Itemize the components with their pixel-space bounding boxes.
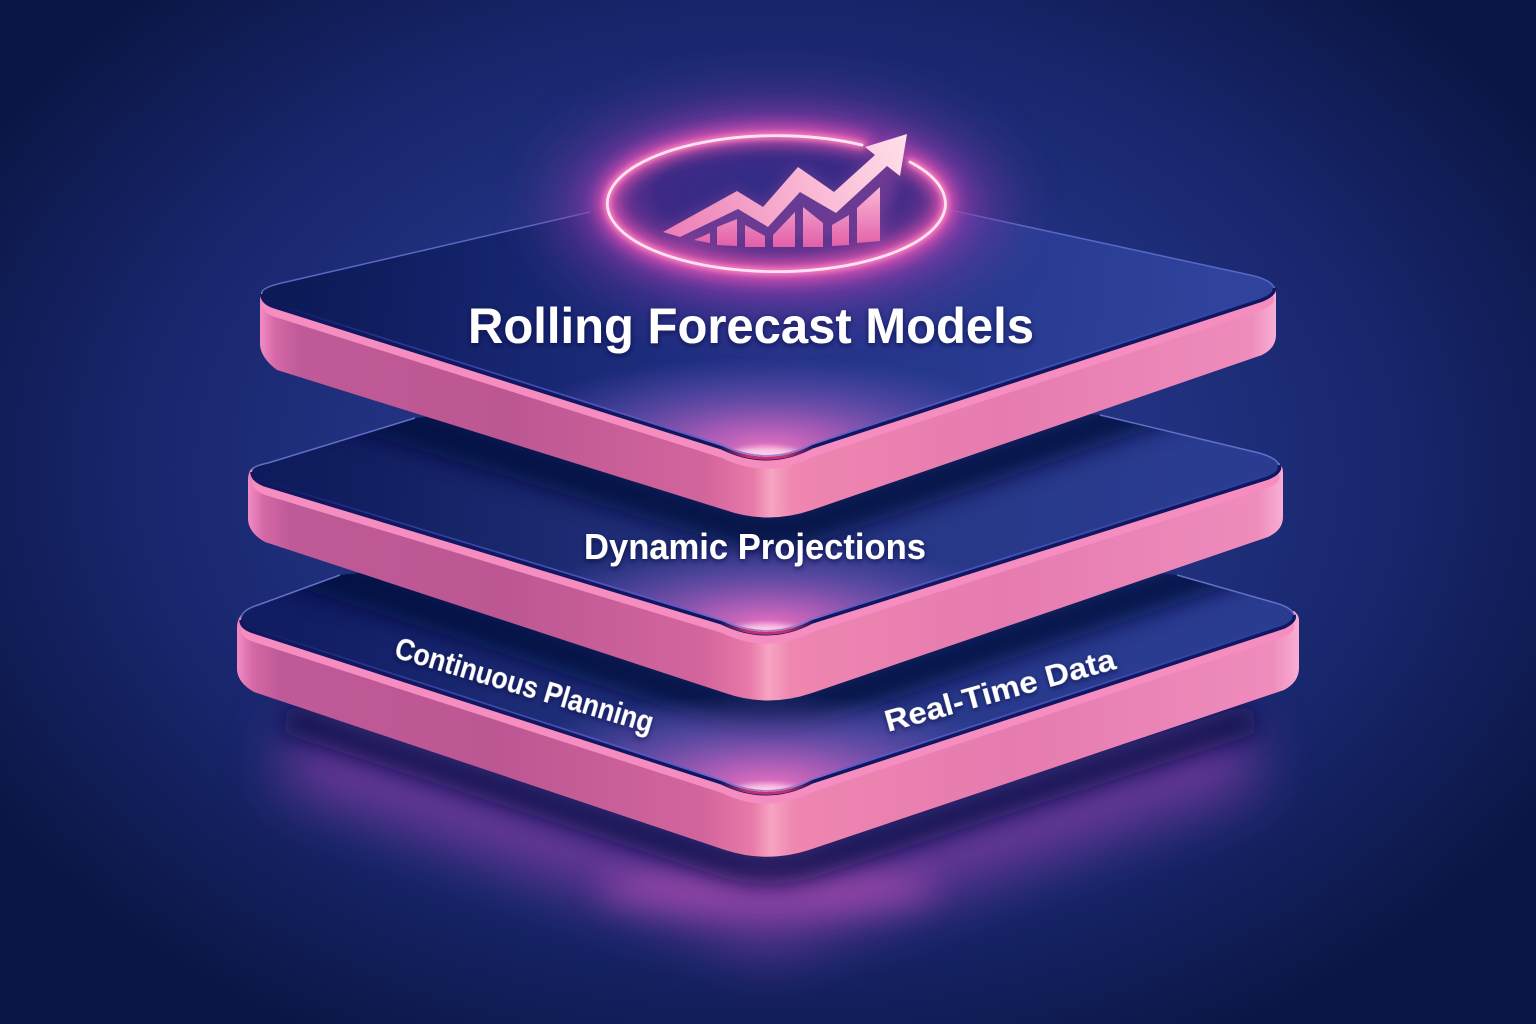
middle layer rim highlight (252, 474, 1280, 644)
title: Rolling Forecast Models (468, 298, 1034, 354)
top layer edge lines (262, 210, 1274, 459)
chart arrow (663, 134, 907, 237)
top layer top face (262, 190, 1274, 459)
bottom layer side (237, 611, 1299, 857)
icon: glowing ring with rising chart (553, 100, 1003, 310)
glow beneath the stack (285, 718, 1255, 915)
ring interior (609, 136, 947, 272)
bottom layer rim highlight (241, 623, 1294, 804)
panel: middle layer, Dynamic Projections (247, 370, 1284, 711)
corner glow (247, 474, 1284, 522)
panel: bottom layer, Continuous Planning and Real-Time Data (236, 530, 1300, 877)
middle layer edge lines (252, 415, 1280, 634)
bottom layer edge lines (241, 575, 1294, 794)
bottom layer top face (241, 530, 1294, 794)
label: Dynamic Projections: Dynamic Projections (584, 526, 926, 567)
top layer rim highlight (262, 296, 1274, 468)
corner glow (259, 294, 1277, 346)
label: Continuous Planning: Continuous Planning (391, 630, 658, 740)
middle layer side (248, 463, 1283, 700)
top layer shading (566, 364, 961, 457)
chart glow (663, 134, 907, 247)
label: Real-Time Data: Real-Time Data (881, 641, 1120, 739)
corner glow (236, 620, 1300, 672)
middle layer shading (354, 414, 1178, 632)
bottom layer shading (292, 573, 1246, 792)
ring haze (553, 100, 1003, 310)
middle layer top face (252, 380, 1280, 634)
top layer side (260, 286, 1276, 518)
glowing ring (607, 136, 945, 272)
chart bars (694, 187, 880, 247)
panel: top layer plate (259, 190, 1277, 540)
